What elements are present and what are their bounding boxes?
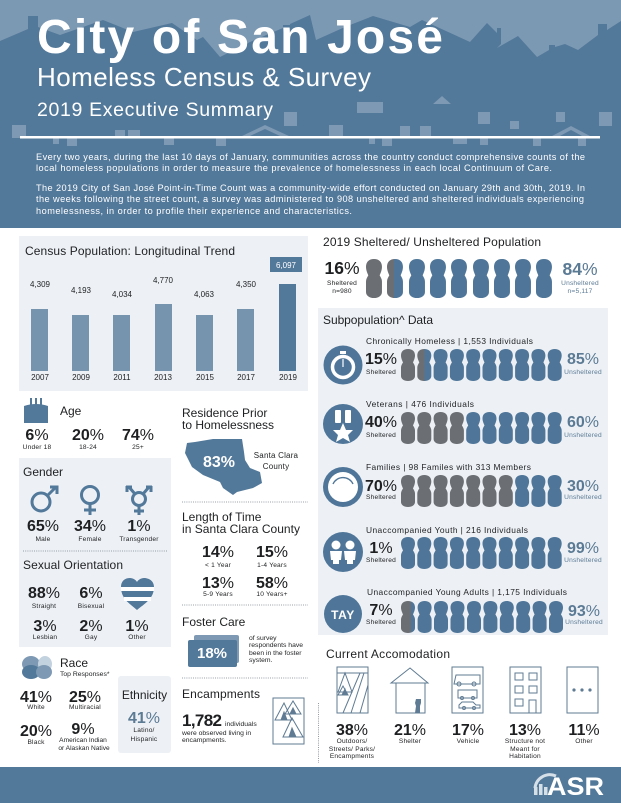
note: top responses: Top Responses* bbox=[60, 671, 110, 678]
intro paragraph two bbox=[36, 183, 585, 216]
stat: unsheltered 84%: 84% bbox=[562, 259, 598, 279]
row: families: Families | 98 Familes with 313 Members bbox=[366, 462, 531, 472]
intro paragraph two: The 2019 City of San José Point-in-Time Count was a community-wide effort conducted on January 29th and 30th, 2019. In bbox=[36, 183, 585, 193]
bar chart: 2015 bbox=[196, 373, 214, 382]
stat: black: 20% bbox=[20, 723, 52, 740]
heading: length of time: Length of Time bbox=[182, 510, 262, 524]
row: unaccompanied youth: Unaccompanied Youth | 216 Individuals bbox=[366, 525, 528, 535]
bar chart: 4,309 bbox=[30, 280, 51, 289]
panel: age bbox=[23, 398, 154, 451]
icon: transgender symbol bbox=[126, 486, 152, 515]
stat: 25+: 74% bbox=[122, 427, 154, 444]
row: chronically homeless: Unsheltered bbox=[564, 369, 602, 376]
stat: straight: 88% bbox=[28, 585, 60, 602]
stat: latino: 41% bbox=[128, 710, 160, 727]
row: families: 70% bbox=[365, 478, 397, 495]
text: foster care note: respondents have bbox=[249, 642, 303, 649]
text: foster care note bbox=[249, 635, 303, 664]
icon: stopwatch bbox=[324, 346, 362, 384]
icon: male symbol bbox=[32, 487, 57, 511]
label: santa clara county bbox=[254, 451, 299, 471]
bar chart: 6,097 bbox=[276, 261, 297, 270]
stat: male: 65% bbox=[27, 518, 59, 535]
row: families: Unsheltered bbox=[564, 494, 602, 501]
stat: latino: Latino/ bbox=[133, 727, 155, 734]
stat: american indian: American Indian bbox=[59, 737, 107, 744]
stat: gay: 2% bbox=[79, 618, 103, 635]
people chart: families bbox=[401, 475, 562, 507]
stat: encampment count bbox=[181, 711, 257, 744]
stat: 25+: 25+ bbox=[132, 444, 144, 451]
stat: bisexual: 6% bbox=[79, 585, 103, 602]
intro paragraph one: local homeless populations in order to measure the prevalence of homelessness in each local Continuum of Care. bbox=[36, 163, 552, 173]
panel: race bbox=[20, 656, 110, 752]
stat: sheltered 16%: n=980 bbox=[332, 288, 352, 295]
stat: black: Black bbox=[27, 739, 45, 746]
heading: gender: Gender bbox=[23, 465, 63, 479]
row: unaccompanied youth: 1% bbox=[369, 540, 393, 557]
bar chart: 2009 bbox=[72, 373, 90, 382]
stat: bisexual bbox=[78, 585, 105, 610]
icon: structure bbox=[510, 667, 541, 713]
stat: encampment count: 1,782 bbox=[182, 711, 222, 730]
stat: latino bbox=[128, 710, 160, 743]
stat: under 18: Under 18 bbox=[23, 444, 51, 451]
stat: structure: 13% bbox=[509, 722, 541, 739]
heading: current accommodation: Current Accomodation bbox=[326, 647, 450, 661]
stat: straight bbox=[28, 585, 60, 610]
stat: 1-4 years bbox=[256, 544, 288, 569]
stat: sheltered 16%: 16% bbox=[324, 258, 360, 278]
heading: foster care: Foster Care bbox=[182, 615, 246, 629]
stat: female bbox=[74, 518, 106, 543]
bar chart: 4,350 bbox=[236, 280, 257, 289]
row: unaccompanied young adults: 7% bbox=[369, 602, 393, 619]
stat: multiracial: 25% bbox=[69, 689, 101, 706]
row: unaccompanied young adults: 93% bbox=[568, 603, 600, 620]
stat: vehicle: 17% bbox=[452, 722, 484, 739]
icon: outdoors bbox=[337, 667, 368, 713]
stat: vehicle: Vehicle bbox=[457, 738, 479, 745]
bar chart: 2007 bbox=[31, 373, 49, 382]
heading: sexual orientation: Sexual Orientation bbox=[23, 558, 123, 572]
heading: race: Race bbox=[60, 656, 88, 670]
heading: length of time: in Santa Clara County bbox=[182, 522, 300, 536]
stat: structure: Structure not bbox=[505, 738, 545, 745]
people chart: chronically homeless bbox=[401, 349, 562, 381]
icon: shelter house bbox=[391, 668, 428, 713]
stat: lesbian bbox=[33, 618, 57, 641]
people chart: young adults bbox=[401, 601, 563, 633]
stat: white: White bbox=[27, 704, 45, 711]
people chart: veterans bbox=[401, 412, 562, 444]
heading: sheltered unsheltered: 2019 Sheltered/ Unsheltered Population bbox=[323, 235, 541, 249]
heading: age: Age bbox=[60, 404, 82, 418]
subtitle: Homeless Census & Survey bbox=[37, 62, 371, 92]
header rule bbox=[20, 136, 600, 138]
stat: american indian: or Alaskan Native bbox=[58, 745, 110, 752]
stat: lesbian: 3% bbox=[33, 618, 57, 635]
stat: shelter: Shelter bbox=[399, 738, 422, 745]
icon: TAY bbox=[324, 595, 362, 633]
intro paragraph two: the weeks following the street count, a survey was administered to 908 unsheltered and sheltered individuals experiencing bbox=[36, 194, 584, 204]
stat: bisexual: Bisexual bbox=[78, 603, 105, 610]
house windows bbox=[12, 96, 612, 146]
stat: other orientation: Other bbox=[128, 634, 146, 641]
row: families bbox=[323, 462, 602, 507]
stat: under 18 bbox=[23, 427, 51, 451]
text: foster care note: of survey bbox=[249, 635, 277, 642]
stat: male bbox=[27, 518, 59, 543]
stat: american indian: 9% bbox=[71, 721, 95, 738]
stat: outdoors: Streets/ Parks/ bbox=[329, 746, 375, 753]
stat: lesbian: Lesbian bbox=[33, 634, 57, 641]
row: veterans bbox=[323, 399, 602, 444]
icon: folder with 18%: 18% bbox=[197, 645, 227, 662]
icon: female symbol bbox=[82, 486, 98, 515]
icon: medal bbox=[323, 404, 363, 444]
stat: encampment count: individuals bbox=[225, 721, 257, 728]
panel: foster care bbox=[182, 615, 303, 667]
panel: subpopulation data bbox=[318, 308, 608, 635]
text: foster care note: system. bbox=[249, 657, 273, 664]
stat: structure: Meant for bbox=[510, 746, 540, 753]
stat: unsheltered 84%: n=5,117 bbox=[568, 288, 593, 295]
heading: subpopulation: Subpopulation^ Data bbox=[323, 313, 433, 327]
icon: vehicles bbox=[452, 667, 483, 713]
label: santa clara county: County bbox=[263, 462, 289, 471]
row: veterans: Unsheltered bbox=[564, 432, 602, 439]
report label: 2019 Executive Summary bbox=[37, 99, 273, 121]
stat: transgender: 1% bbox=[127, 518, 151, 535]
stat: 83 percent: 83% bbox=[203, 454, 235, 471]
label: santa clara county: Santa Clara bbox=[254, 451, 299, 460]
people chart: population bbox=[366, 259, 552, 298]
stat: structure: Habitation bbox=[509, 753, 541, 760]
stat: under 1 year bbox=[202, 544, 234, 569]
intro paragraph two: homelessness, in order to profile their experience and characteristics. bbox=[36, 206, 352, 216]
people chart: youth bbox=[401, 537, 562, 569]
intro paragraph one bbox=[36, 152, 585, 173]
row: unaccompanied youth: Unsheltered bbox=[564, 557, 602, 564]
row: unaccompanied young adults: Unaccompanied Young Adults | 1,175 Individuals bbox=[367, 587, 567, 597]
row: families: 30% bbox=[567, 478, 599, 495]
stat: other: Other bbox=[575, 738, 593, 745]
map: santa clara county bbox=[185, 439, 262, 495]
stat: 1-4 years: 1-4 Years bbox=[257, 562, 287, 569]
house skyline bbox=[0, 15, 621, 75]
header banner bbox=[0, 0, 621, 228]
panel: encampments bbox=[181, 687, 304, 744]
stat: outdoors bbox=[329, 722, 375, 760]
stat: latino: Hispanic bbox=[131, 736, 158, 743]
row: chronically homeless: Sheltered bbox=[366, 369, 396, 376]
stat: under 18: 6% bbox=[25, 427, 49, 444]
stat: encampment count: were observed living in bbox=[181, 730, 251, 737]
row: chronically homeless: 15% bbox=[365, 351, 397, 368]
row: unaccompanied youth: Sheltered bbox=[366, 557, 396, 564]
stat: transgender: Transgender bbox=[119, 536, 159, 543]
stat: multiracial: Multiracial bbox=[69, 704, 101, 711]
icon: overlapping race circles bbox=[22, 656, 52, 679]
stat: 5-9 years: 13% bbox=[202, 575, 234, 592]
panel: sheltered and unsheltered population bbox=[323, 235, 599, 298]
bar chart: 4,770 bbox=[153, 276, 174, 285]
row: veterans: Veterans | 476 Individuals bbox=[366, 399, 474, 409]
stat: 18-24: 18-24 bbox=[79, 444, 97, 451]
row: chronically homeless bbox=[324, 336, 602, 384]
stat: sheltered 16%: Sheltered bbox=[327, 280, 357, 287]
bar chart: 2013 bbox=[154, 373, 172, 382]
bar chart: 2019 bbox=[279, 373, 297, 382]
heading: residence bbox=[182, 406, 274, 432]
stat: straight: Straight bbox=[32, 603, 56, 610]
bar chart bbox=[30, 257, 302, 382]
row: families: Sheltered bbox=[366, 494, 396, 501]
stat: structure bbox=[505, 722, 545, 760]
heading: length of time bbox=[182, 510, 300, 536]
panel: residence prior bbox=[182, 406, 299, 495]
stat: male: Male bbox=[35, 536, 51, 543]
icon: TAY: TAY bbox=[331, 608, 355, 622]
stat: female: Female bbox=[78, 536, 102, 543]
panel: current accommodation bbox=[326, 647, 600, 760]
row: veterans: 40% bbox=[365, 414, 397, 431]
stat: 10 years+: 10 Years+ bbox=[256, 591, 288, 598]
footer bar bbox=[0, 767, 621, 803]
row: unaccompanied youth: 99% bbox=[567, 540, 599, 557]
row: unaccompanied young adults: Unsheltered bbox=[565, 619, 603, 626]
icon: tents bbox=[273, 698, 304, 744]
icon: birthday cake bbox=[24, 398, 48, 423]
stat: sheltered 16% bbox=[324, 258, 360, 295]
row: veterans: 60% bbox=[567, 414, 599, 431]
stat: other: 11% bbox=[568, 722, 600, 739]
logo: ASR: ASR bbox=[547, 773, 604, 801]
panel: ethnicity bbox=[118, 676, 171, 753]
stat: other orientation: 1% bbox=[125, 618, 149, 635]
stat: 10 years+: 58% bbox=[256, 575, 288, 592]
stat: shelter: 21% bbox=[394, 722, 426, 739]
stat: transgender bbox=[119, 518, 159, 543]
icon: striped heart bbox=[121, 578, 154, 610]
heading: residence: to Homelessness bbox=[182, 418, 274, 432]
row: unaccompanied young adults: Sheltered bbox=[366, 619, 396, 626]
stat: white: 41% bbox=[20, 689, 52, 706]
stat: outdoors: Outdoors/ bbox=[337, 738, 367, 745]
intro paragraph one: Every two years, during the last 10 days of January, communities across the country conduct comprehensive counts of the bbox=[36, 152, 585, 162]
stat: outdoors: 38% bbox=[336, 722, 368, 739]
stat: 18-24: 20% bbox=[72, 427, 104, 444]
row: unaccompanied young adults bbox=[324, 587, 603, 633]
panel: gender and sexual orientation bbox=[19, 458, 171, 647]
stat: 5-9 years: 5-9 Years bbox=[203, 591, 233, 598]
stat: unsheltered 84%: Unsheltered bbox=[561, 280, 599, 287]
stat: under 1 year: 14% bbox=[202, 544, 234, 561]
heading: encampments: Encampments bbox=[182, 687, 260, 701]
text: foster care note: been in the foster bbox=[249, 650, 302, 657]
row: chronically homeless: 85% bbox=[567, 351, 599, 368]
stat: under 1 year: < 1 Year bbox=[205, 562, 232, 569]
panel: longitudinal trend bbox=[19, 236, 308, 391]
stat: outdoors: Encampments bbox=[330, 753, 375, 760]
stat: 1-4 years: 15% bbox=[256, 544, 288, 561]
bar chart: 4,063 bbox=[194, 290, 215, 299]
icon: youth bbox=[323, 532, 363, 572]
title: City of San José bbox=[37, 11, 443, 64]
stat: encampment count: encampments. bbox=[182, 737, 227, 744]
row: chronically homeless: Chronically Homeless | 1,553 Individuals bbox=[366, 336, 533, 346]
row: veterans: Sheltered bbox=[366, 432, 396, 439]
icon: other bbox=[567, 667, 598, 713]
bar chart: 2011 bbox=[113, 373, 131, 382]
stat: gay: Gay bbox=[85, 634, 98, 641]
stat: american indian bbox=[58, 721, 110, 752]
stat: unsheltered 84% bbox=[561, 259, 599, 295]
heading: ethnicity: Ethnicity bbox=[122, 688, 167, 702]
icon: family circle bbox=[323, 467, 363, 507]
panel: length of time bbox=[182, 510, 300, 598]
stat: female: 34% bbox=[74, 518, 106, 535]
bar chart: 2017 bbox=[237, 373, 255, 382]
heading: census population: Census Population: Longitudinal Trend bbox=[25, 244, 235, 258]
row: unaccompanied youth bbox=[323, 525, 602, 572]
bar chart: 4,193 bbox=[71, 286, 92, 295]
bar chart: 4,034 bbox=[112, 290, 133, 299]
heading: residence: Residence Prior bbox=[182, 406, 267, 420]
